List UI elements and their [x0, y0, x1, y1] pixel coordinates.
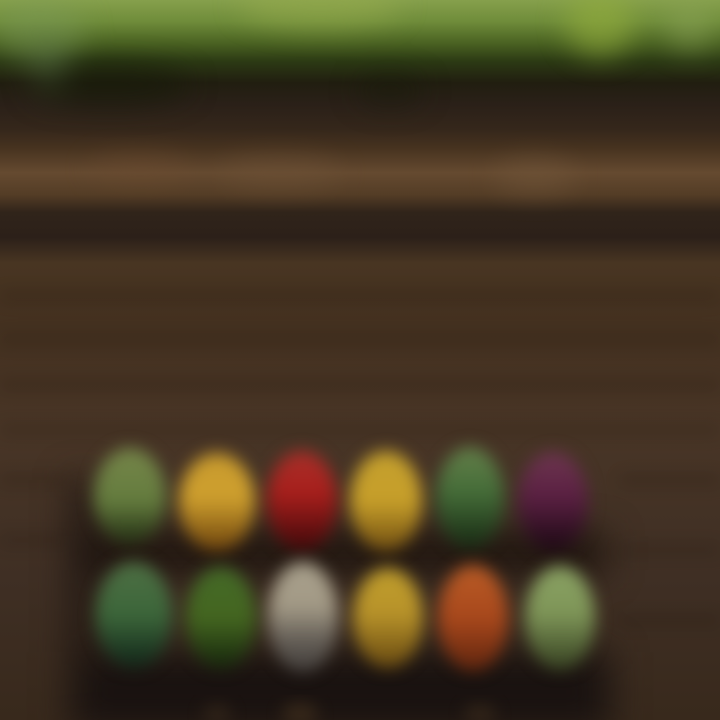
grass mottling: [0, 0, 714, 106]
seed: yellow: [179, 453, 255, 551]
soil furrow texture: [0, 296, 720, 620]
seed: leaf green: [186, 567, 256, 669]
seed: yellow: [353, 568, 423, 668]
seed: golden yellow: [350, 451, 422, 551]
seed: green: [436, 447, 504, 549]
seed: light green: [94, 448, 166, 544]
seed: white: [268, 562, 338, 672]
seed: teal green: [96, 562, 172, 668]
bottom row of coloured seeds: [96, 562, 595, 672]
seed: orange: [438, 565, 508, 671]
seed: pale green: [525, 566, 595, 670]
seed: red: [267, 451, 337, 551]
soil patches between the seed stems: [203, 702, 496, 720]
dark shadow behind seed rows: [70, 480, 610, 720]
seed: purple: [518, 452, 588, 552]
soil highlights on the light band: [90, 157, 575, 192]
top row of coloured seeds: [94, 447, 588, 552]
